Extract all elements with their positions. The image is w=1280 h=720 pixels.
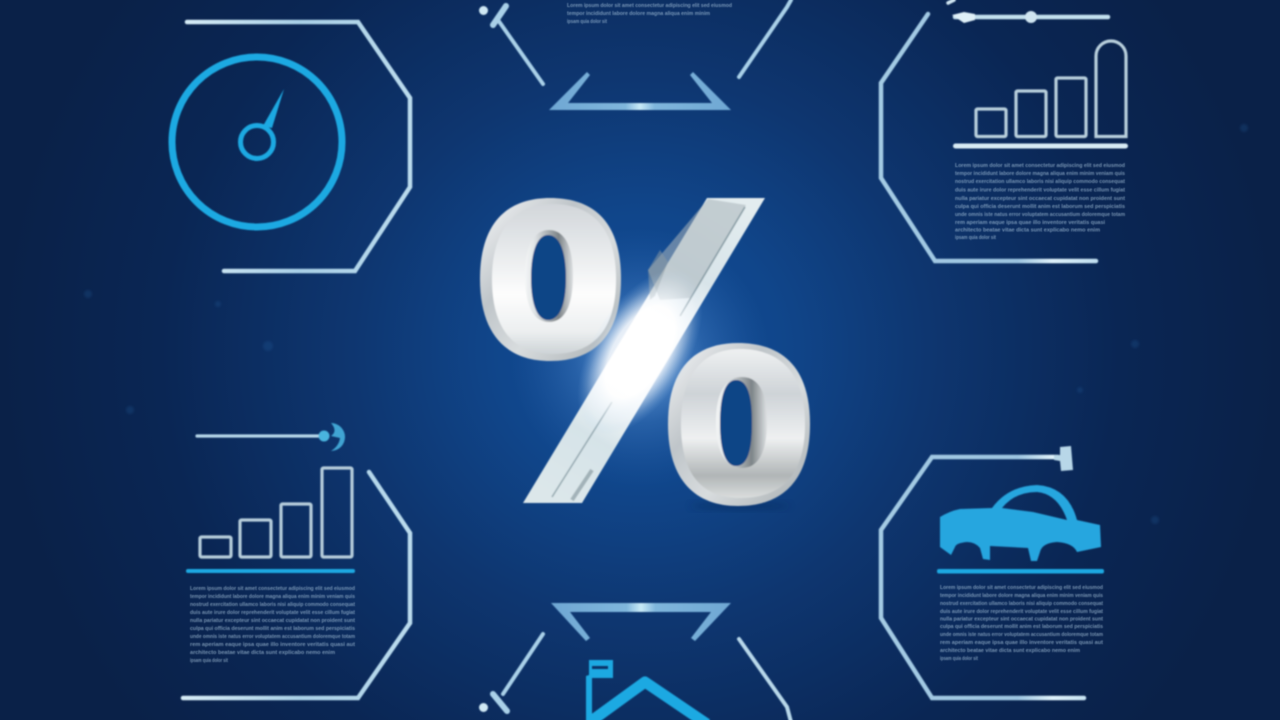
panel outline bbox=[881, 14, 1096, 261]
text block: bottom left: rem aperiam eaque ipsa quae illo inventore veritatis quasi aut bbox=[190, 642, 355, 648]
text block: top right: ipsam quia dolor sit bbox=[955, 235, 996, 241]
chart baseline bbox=[937, 569, 1104, 574]
text block: bottom left: nulla pariatur excepteur sint occaecat cupidatat non proident sunt bbox=[190, 618, 355, 624]
connector right bbox=[739, 639, 791, 720]
right zero bbox=[668, 343, 810, 506]
left zero bbox=[480, 198, 621, 361]
chart baseline bbox=[953, 144, 1128, 148]
panel outline bbox=[183, 472, 410, 698]
connector left bbox=[479, 6, 543, 84]
text block: top right: nulla pariatur excepteur sint occaecat cupidatat non proident sunt bbox=[955, 196, 1125, 202]
text block: bottom left: Lorem ipsum dolor sit amet consectetur adipiscing elit sed eiusmod bbox=[190, 586, 355, 592]
text block: bottom right bbox=[940, 585, 1103, 662]
text block: bottom right: nulla pariatur excepteur sint occaecat cupidatat non proident sunt bbox=[940, 616, 1103, 622]
panel: bottom centre bbox=[479, 603, 791, 720]
trapezoid frame bbox=[551, 603, 731, 641]
background particles bbox=[84, 124, 1248, 524]
text block: bottom right: ipsam quia dolor sit bbox=[940, 656, 978, 662]
icon: car bbox=[940, 485, 1101, 561]
text block: bottom right: tempor incididunt labore dolore magna aliqua enim minim veniam quis bbox=[940, 593, 1103, 599]
text block: bottom left: tempor incididunt labore dolore magna aliqua enim minim veniam quis bbox=[190, 594, 355, 600]
central glow bbox=[510, 228, 770, 488]
text block: top centre: ipsam quia dolor sit bbox=[567, 19, 607, 25]
panel: top centre bbox=[479, 0, 791, 110]
text block: bottom right: architecto beatae vitae dicta sunt explicabo nemo enim bbox=[940, 648, 1080, 654]
text block: bottom left: nostrud exercitation ullamco laboris nisi aliquip commodo consequat bbox=[190, 602, 355, 608]
specular highlight bbox=[551, 248, 729, 456]
text block: top right: rem aperiam eaque ipsa quae illo inventore veritatis quasi bbox=[955, 220, 1106, 226]
text block: bottom right: nostrud exercitation ullamco laboris nisi aliquip commodo consequat bbox=[940, 601, 1103, 607]
text block: bottom left: unde omnis iste natus error voluptatem accusantium doloremque totam bbox=[190, 634, 355, 640]
text block: bottom right: unde omnis iste natus error voluptatem accusantium doloremque totam bbox=[940, 632, 1103, 638]
text block: top centre bbox=[567, 3, 732, 25]
text block: top right: Lorem ipsum dolor sit amet consectetur adipiscing elit sed eiusmod bbox=[955, 163, 1125, 169]
text block: bottom left: architecto beatae vitae dicta sunt explicabo nemo enim bbox=[190, 650, 335, 656]
trapezoid frame bbox=[549, 72, 731, 110]
chart baseline bbox=[186, 569, 355, 573]
text block: top centre: tempor incididunt labore dolore magna aliqua enim minim bbox=[567, 11, 710, 17]
icon: gauge bbox=[172, 57, 342, 227]
panel: car loan bottom right bbox=[881, 446, 1104, 698]
connector slider bbox=[948, 0, 1108, 23]
panel outline bbox=[881, 457, 1084, 698]
bar chart bbox=[976, 41, 1126, 136]
text block: top centre: Lorem ipsum dolor sit amet consectetur adipiscing elit sed eiusmod bbox=[567, 3, 732, 9]
text block: bottom right: duis aute irure dolor reprehenderit voluptate velit esse cillum fugiat bbox=[940, 609, 1103, 615]
icon: house bbox=[586, 660, 707, 720]
panel outline bbox=[187, 22, 410, 271]
percent symbol bbox=[480, 198, 810, 509]
text block: bottom left bbox=[190, 586, 355, 664]
slash bbox=[523, 198, 765, 503]
text block: bottom right: Lorem ipsum dolor sit amet consectetur adipiscing elit sed eiusmod bbox=[940, 585, 1103, 591]
text block: bottom right: rem aperiam eaque ipsa quae illo inventore veritatis quasi aut bbox=[940, 640, 1103, 646]
connector right bbox=[739, 0, 791, 77]
text block: top right: unde omnis iste natus error voluptatem accusantium doloremque totam bbox=[955, 212, 1125, 218]
bar chart bbox=[200, 468, 352, 557]
panel: bar chart top right bbox=[881, 0, 1128, 261]
panel: speed gauge bbox=[172, 22, 410, 271]
shadow bbox=[690, 503, 790, 509]
text block: top right: tempor incididunt labore dolore magna aliqua enim minim veniam quis bbox=[955, 171, 1125, 177]
text block: bottom left: ipsam quia dolor sit bbox=[190, 658, 228, 664]
text block: bottom right: culpa qui officia deserunt mollit anim est laborum sed perspiciatis bbox=[940, 624, 1103, 630]
connector left bbox=[479, 634, 543, 712]
text block: top right bbox=[955, 163, 1125, 241]
text block: bottom left: duis aute irure dolor reprehenderit voluptate velit esse cillum fugiat bbox=[190, 610, 355, 616]
text block: bottom left: culpa qui officia deserunt mollit anim est laborum sed perspiciatis bbox=[190, 626, 355, 632]
panel: bar chart bottom left bbox=[183, 423, 410, 698]
connector cap bbox=[1054, 446, 1073, 471]
text block: top right: duis aute irure dolor reprehenderit voluptate velit esse cillum fugiat bbox=[955, 188, 1125, 194]
text block: top right: nostrud exercitation ullamco laboris nisi aliquip commodo consequat bbox=[955, 179, 1125, 185]
connector with pie icon bbox=[197, 423, 345, 451]
text block: top right: architecto beatae vitae dicta sunt explicabo nemo enim bbox=[955, 228, 1100, 234]
text block: top right: culpa qui officia deserunt mollit anim est laborum sed perspiciatis bbox=[955, 204, 1125, 210]
